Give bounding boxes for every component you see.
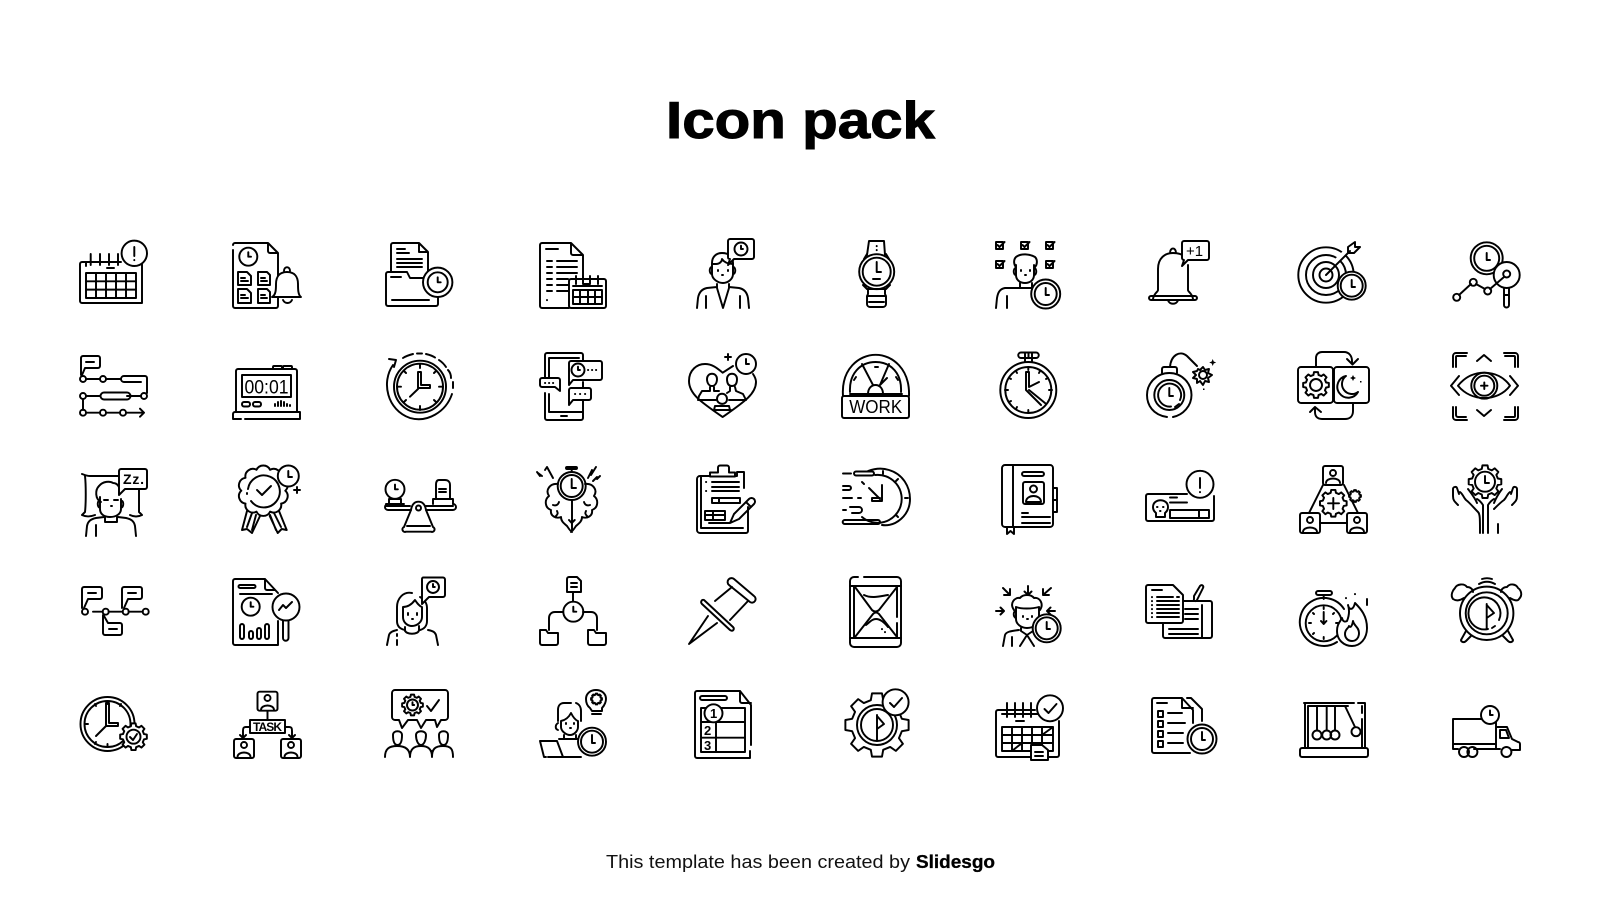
icon: phone with chat bubbles [540,353,602,420]
icon: clock bomb [1147,353,1216,417]
icon: checklist man with clock [996,242,1060,308]
icon: woman with clock bubble [387,578,445,645]
icon: calendar alert [80,241,147,303]
icon text: timer digits: 00:01 [244,378,288,398]
icon: clock with gear check [80,697,147,751]
icon: delivery truck with clock [1453,706,1520,757]
icon: clock and magnifier on a trend [1453,242,1520,308]
icon: eye scanner [1451,353,1518,420]
icon text: TASK: TASK [253,720,282,734]
icon: stopwatch on fire [1300,591,1367,646]
icon: man with clock bubble [697,239,754,308]
icon: brain stopwatch [537,467,600,532]
footer credit: This template has been created by [606,852,910,872]
icon: checklist with clock [1152,698,1216,754]
icon: work gauge sign [842,355,909,418]
icon: digital timer 00:01 [233,366,300,419]
icon: team meeting bubble [385,690,453,757]
icon: folder with document and clock [386,243,452,306]
icon: document with calendar [540,243,606,308]
icon: hands holding gear clock [1453,465,1517,533]
icon: team around a gear [1300,466,1367,533]
icon: woman at laptop with idea [540,690,606,757]
icon text: numerals: 1 [710,706,717,721]
icon: contact notebook [1002,465,1057,534]
icon: award badge with clock [239,465,300,533]
icon: heart with family and clock [689,354,756,417]
icon: alarm clock [1452,578,1521,642]
icon: document with clock and bell [233,243,301,308]
title: Icon pack [666,92,935,150]
icon: timeline path [80,356,147,417]
icon text: WORK: WORK [849,397,902,417]
icon: task hierarchy [234,692,301,758]
icon: target with arrow and clock [1298,242,1366,303]
icon: newton's cradle [1300,703,1368,757]
icon: warning card with skull [1146,471,1214,521]
icon: push pin [689,578,756,644]
icon: wristwatch [859,241,894,307]
icon: clipboard with pen [697,466,755,533]
icon text: +1: +1 [1186,243,1203,260]
icon: speech bubble timeline [82,587,149,635]
icon: circular clock with dashed arrow [387,354,453,419]
icon: stopwatch [1000,352,1056,418]
icon: bell with +1 bubble [1149,241,1209,304]
icon: framed hourglass [850,577,901,647]
icon: person sleeping [82,469,147,536]
icon: day and night cycle [1298,352,1369,419]
icon: clock flow to folders [540,577,606,645]
icon: stacked documents with clip [1146,585,1212,638]
icon text: Zz.: Zz. [123,471,144,487]
icon: stressed man with clock [996,586,1061,646]
icon: gear clock with check [845,689,909,757]
icon: calendar with check [996,695,1063,760]
icon text: numerals: 2 [704,723,711,738]
icon grid [80,239,1521,760]
icon text: numerals: 3 [704,738,711,753]
icon: numbered document [695,691,751,758]
icon: balance time and document [385,480,456,532]
icon: fast clock [843,469,910,525]
icon: report with magnifier [233,579,300,645]
footer credit: Slidesgo [916,852,995,872]
